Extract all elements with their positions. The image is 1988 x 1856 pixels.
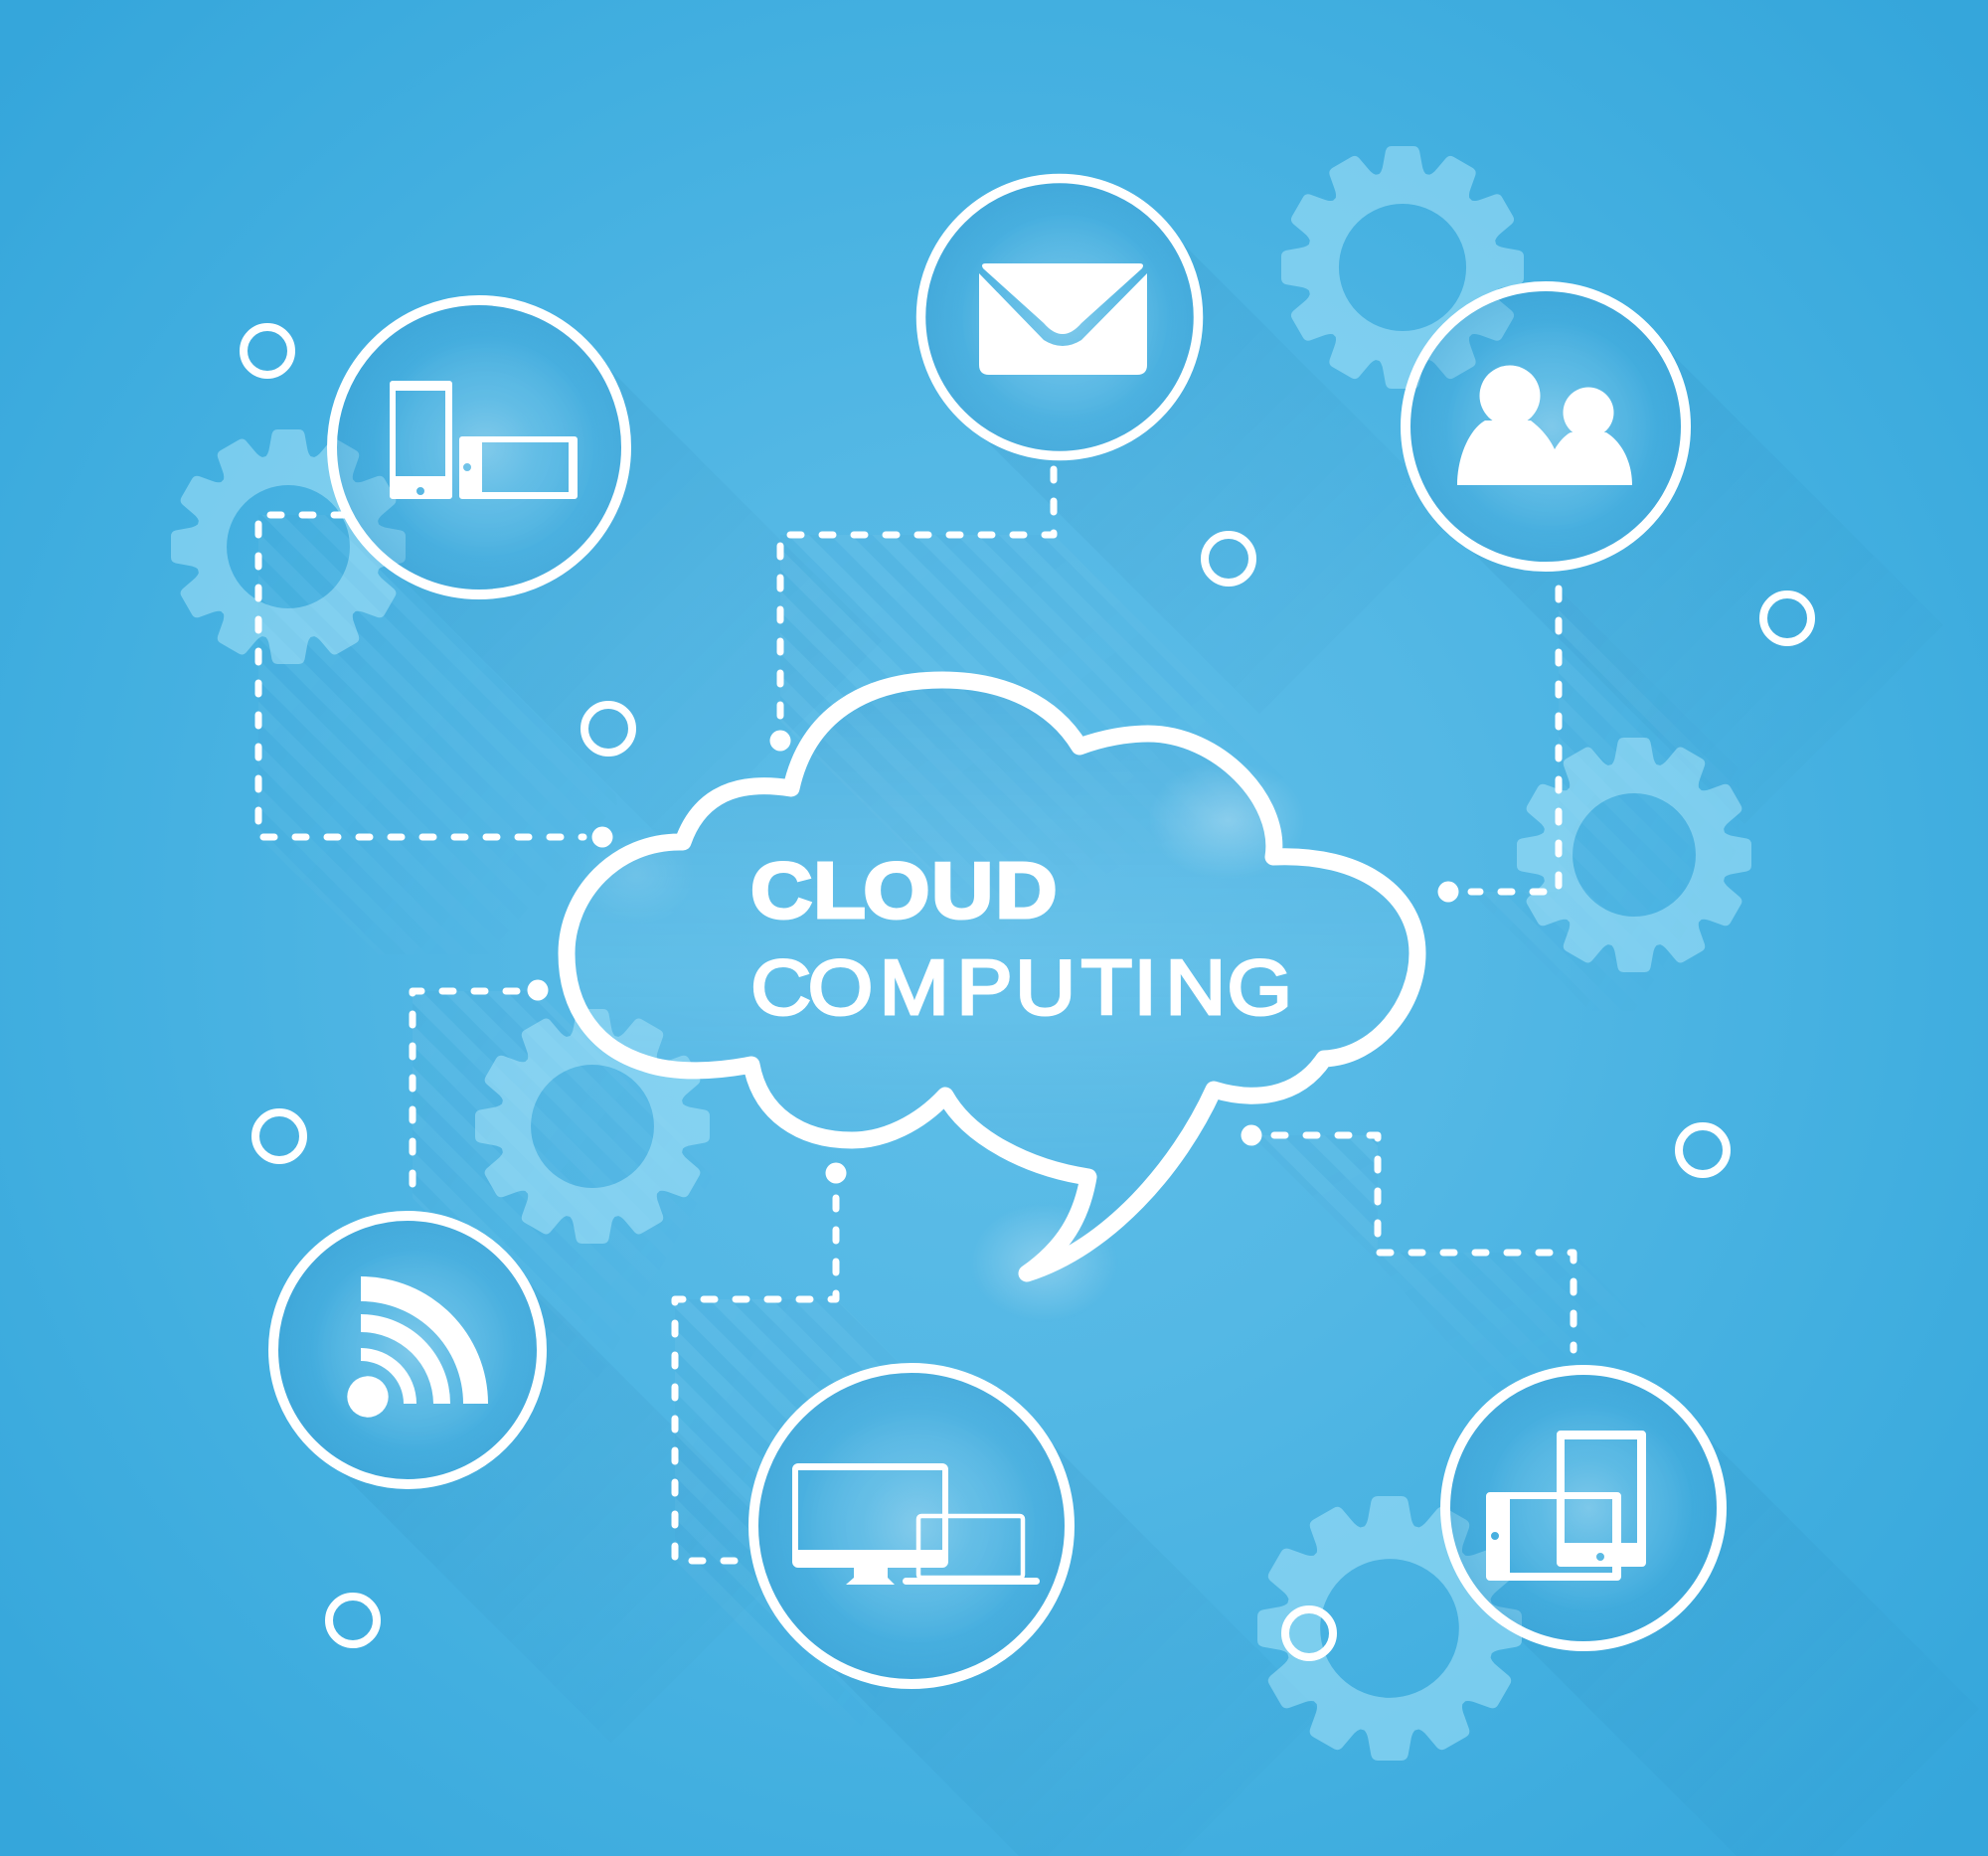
connector: monitor to cloud [675, 1198, 836, 1561]
dashed connectors [258, 469, 1574, 1561]
title [750, 846, 1292, 1031]
icon: phones [390, 381, 578, 499]
gear: right [1517, 738, 1751, 972]
icon: envelope [979, 263, 1147, 375]
gear: top left [171, 429, 406, 664]
gear: centre left [475, 1009, 710, 1244]
connector: mail to cloud [780, 469, 1054, 721]
hatched connector shadows [258, 515, 284, 547]
long shadows [313, 219, 1979, 1856]
circle: tablets [1445, 1370, 1722, 1646]
connector: tablets to cloud [1274, 1135, 1574, 1350]
circle: rss [273, 1216, 542, 1484]
connector end dots [527, 730, 1459, 1183]
connector: mobile devices to cloud [258, 515, 583, 837]
gear: bottom right [1257, 1496, 1522, 1761]
title: CLOUD [750, 846, 1058, 934]
icon: two users [1457, 366, 1632, 485]
circle: people [1406, 286, 1686, 567]
icon: desktop and laptop [792, 1463, 1040, 1585]
circle: monitor and laptop [753, 1368, 1070, 1684]
circle: mail [920, 179, 1199, 455]
title: COMPUTING [750, 945, 1292, 1031]
connector: rss to cloud [413, 991, 517, 1198]
gear: top right [1281, 146, 1524, 389]
circle: mobile devices [332, 300, 626, 594]
connector: people to cloud [1471, 589, 1559, 892]
icon: rss feed [347, 1276, 488, 1418]
gears [171, 146, 1751, 1761]
cloud speech bubble [567, 680, 1417, 1322]
small decorative rings [244, 327, 1811, 1657]
icon: two tablets [1486, 1492, 1621, 1581]
